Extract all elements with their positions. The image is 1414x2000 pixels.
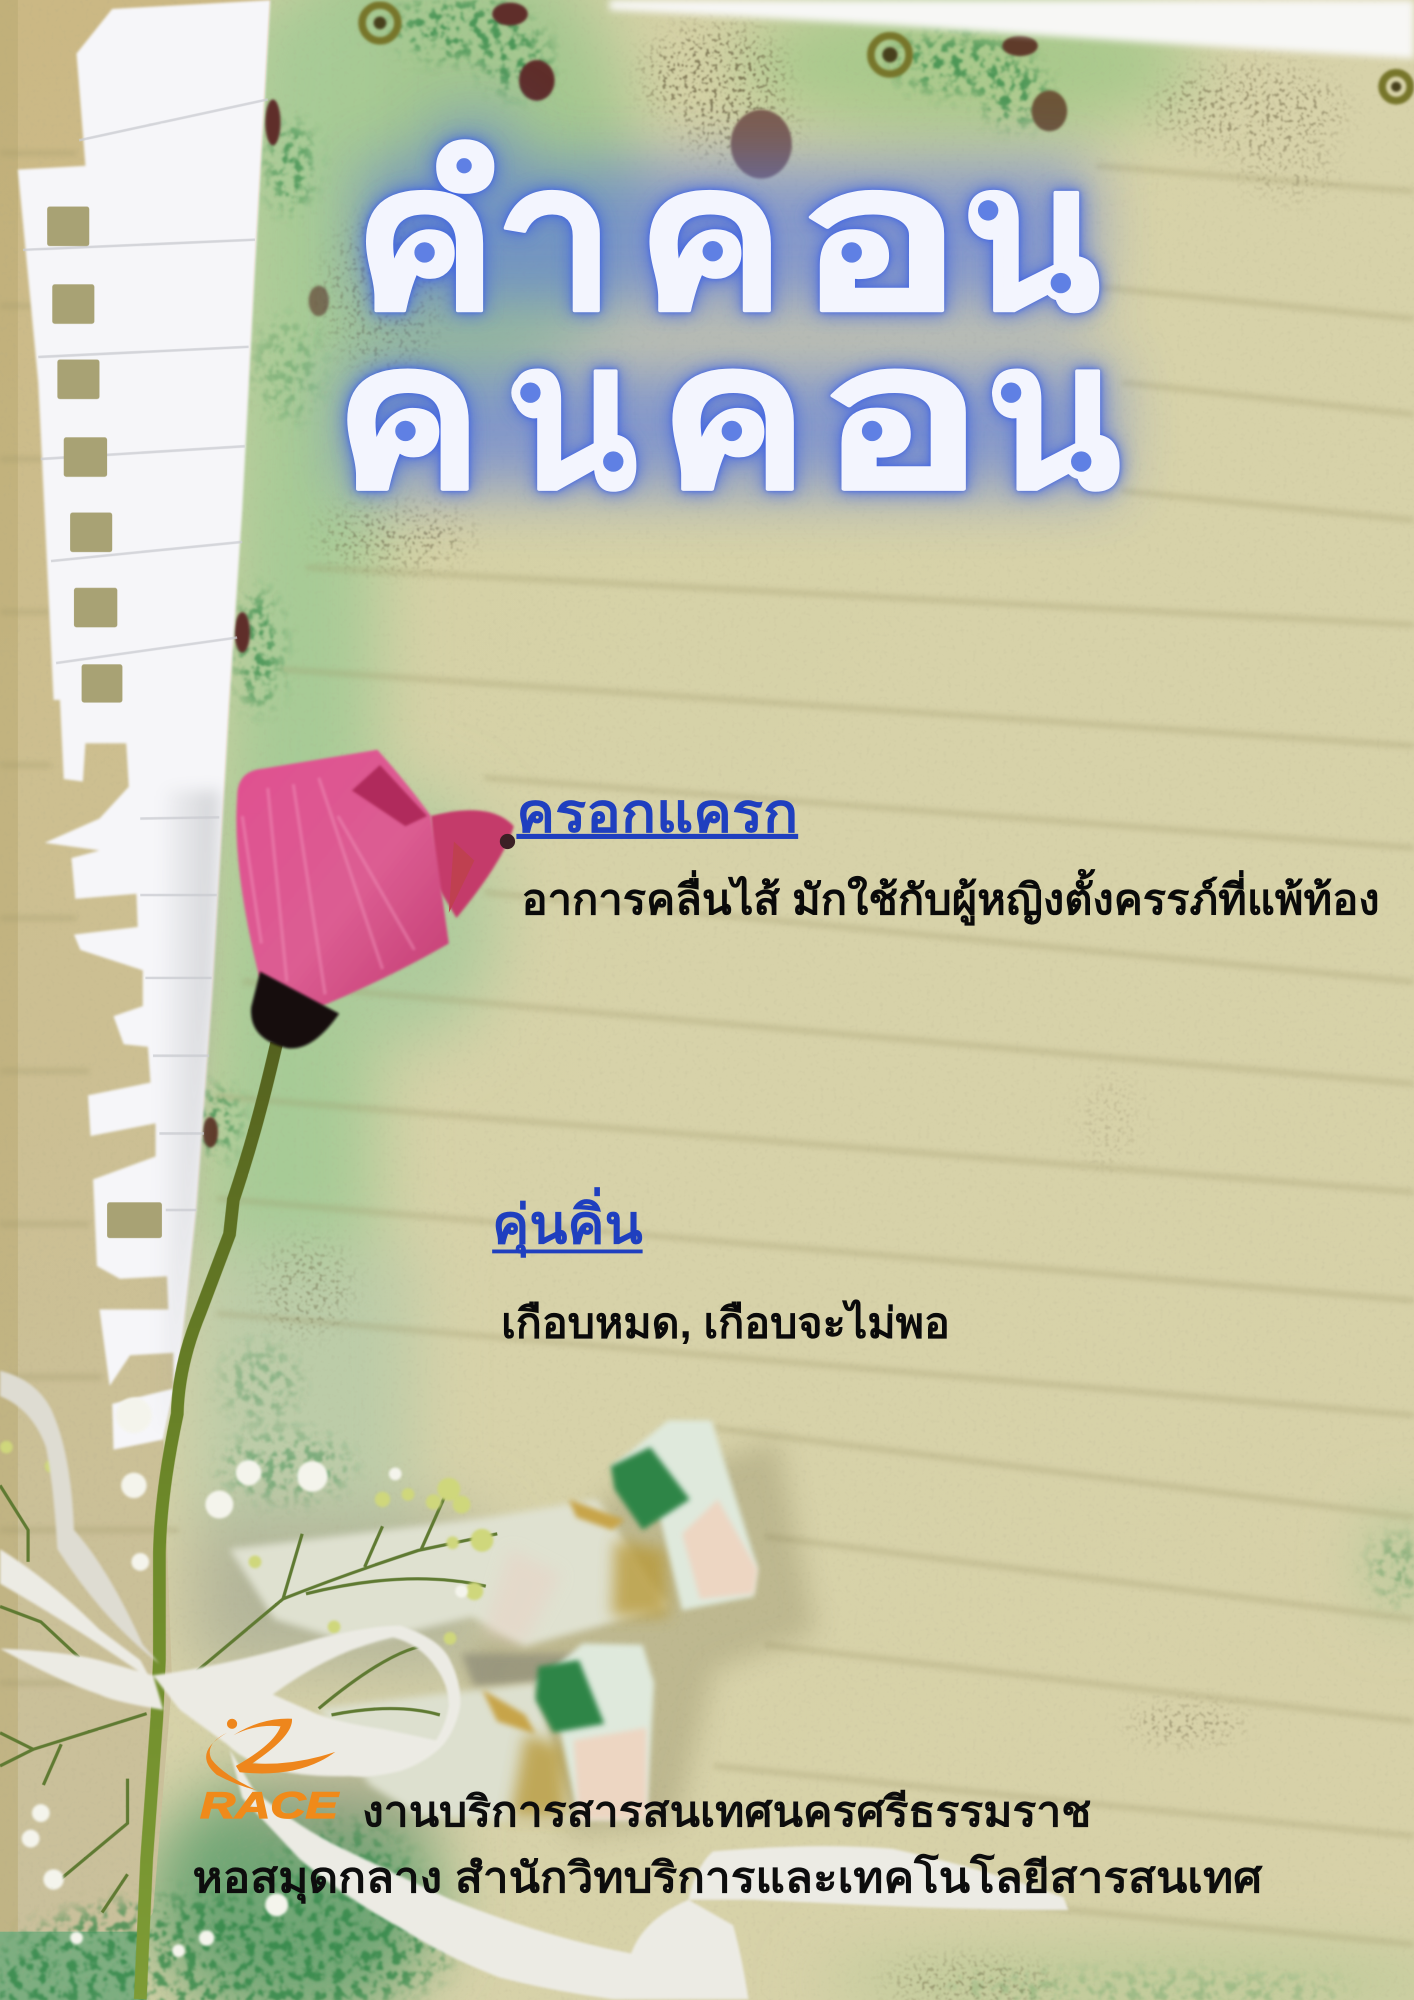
section 2: term and definition: เกือบหมด, เกือบจะไม่พอ [501, 1298, 950, 1346]
title glow: น [963, 127, 1099, 350]
rolled fabric [230, 1420, 816, 1836]
section 2: term and definition: คุ่นคิ่น [492, 1187, 643, 1258]
title glow: คำ [354, 127, 615, 350]
floral print: roses [203, 3, 1410, 1148]
title glow: ค [660, 306, 807, 529]
flower stem [140, 1043, 277, 1999]
flower [236, 750, 515, 1048]
title [335, 127, 1119, 529]
title: น [987, 306, 1119, 529]
section 1: term and definition: ครอกแครก [516, 784, 798, 843]
title: อ [797, 127, 961, 350]
torn notebook page [18, 0, 270, 1450]
title: น [509, 306, 636, 529]
title glow: ค [638, 127, 784, 350]
footer text [193, 1788, 1264, 1904]
title glow: น [987, 306, 1119, 529]
section 1: term and definition: อาการคลื่นไส้ มักใช้กับผู้หญิงตั้งครรภ์ที่แพ้ท้อง [521, 868, 1380, 926]
title: อ [819, 306, 983, 529]
title: คำ [354, 127, 615, 350]
title: ค [638, 127, 784, 350]
RACE logo [200, 1719, 340, 1826]
RACE logo: RACE [200, 1785, 340, 1826]
white ribbon bow [0, 1371, 1068, 1999]
title: น [963, 127, 1099, 350]
title glow: อ [819, 306, 983, 529]
floral print: brown speckle [263, 28, 1345, 2000]
section 1: term and definition [516, 784, 1380, 926]
title glow: อ [797, 127, 961, 350]
title: ค [660, 306, 807, 529]
tan backing sheet [0, 0, 270, 1932]
top-right paper strip [609, 0, 1414, 59]
page edge shading [156, 791, 219, 1428]
title glow [335, 121, 1119, 529]
title glow: น [509, 306, 636, 529]
title glow: ค [335, 306, 482, 529]
footer text: หอสมุดกลาง สำนักวิทบริการและเทคโนโลยีสารสนเทศ [193, 1853, 1264, 1904]
baby's breath sprigs [0, 1397, 497, 1957]
punched holes [47, 207, 162, 1238]
title: ค [335, 306, 482, 529]
white blossoms [22, 1397, 468, 1957]
section 2: term and definition [492, 1187, 950, 1346]
footer text: งานบริการสารสนเทศนครศรีธรรมราช [362, 1788, 1091, 1835]
sprig buds [0, 1441, 493, 1645]
